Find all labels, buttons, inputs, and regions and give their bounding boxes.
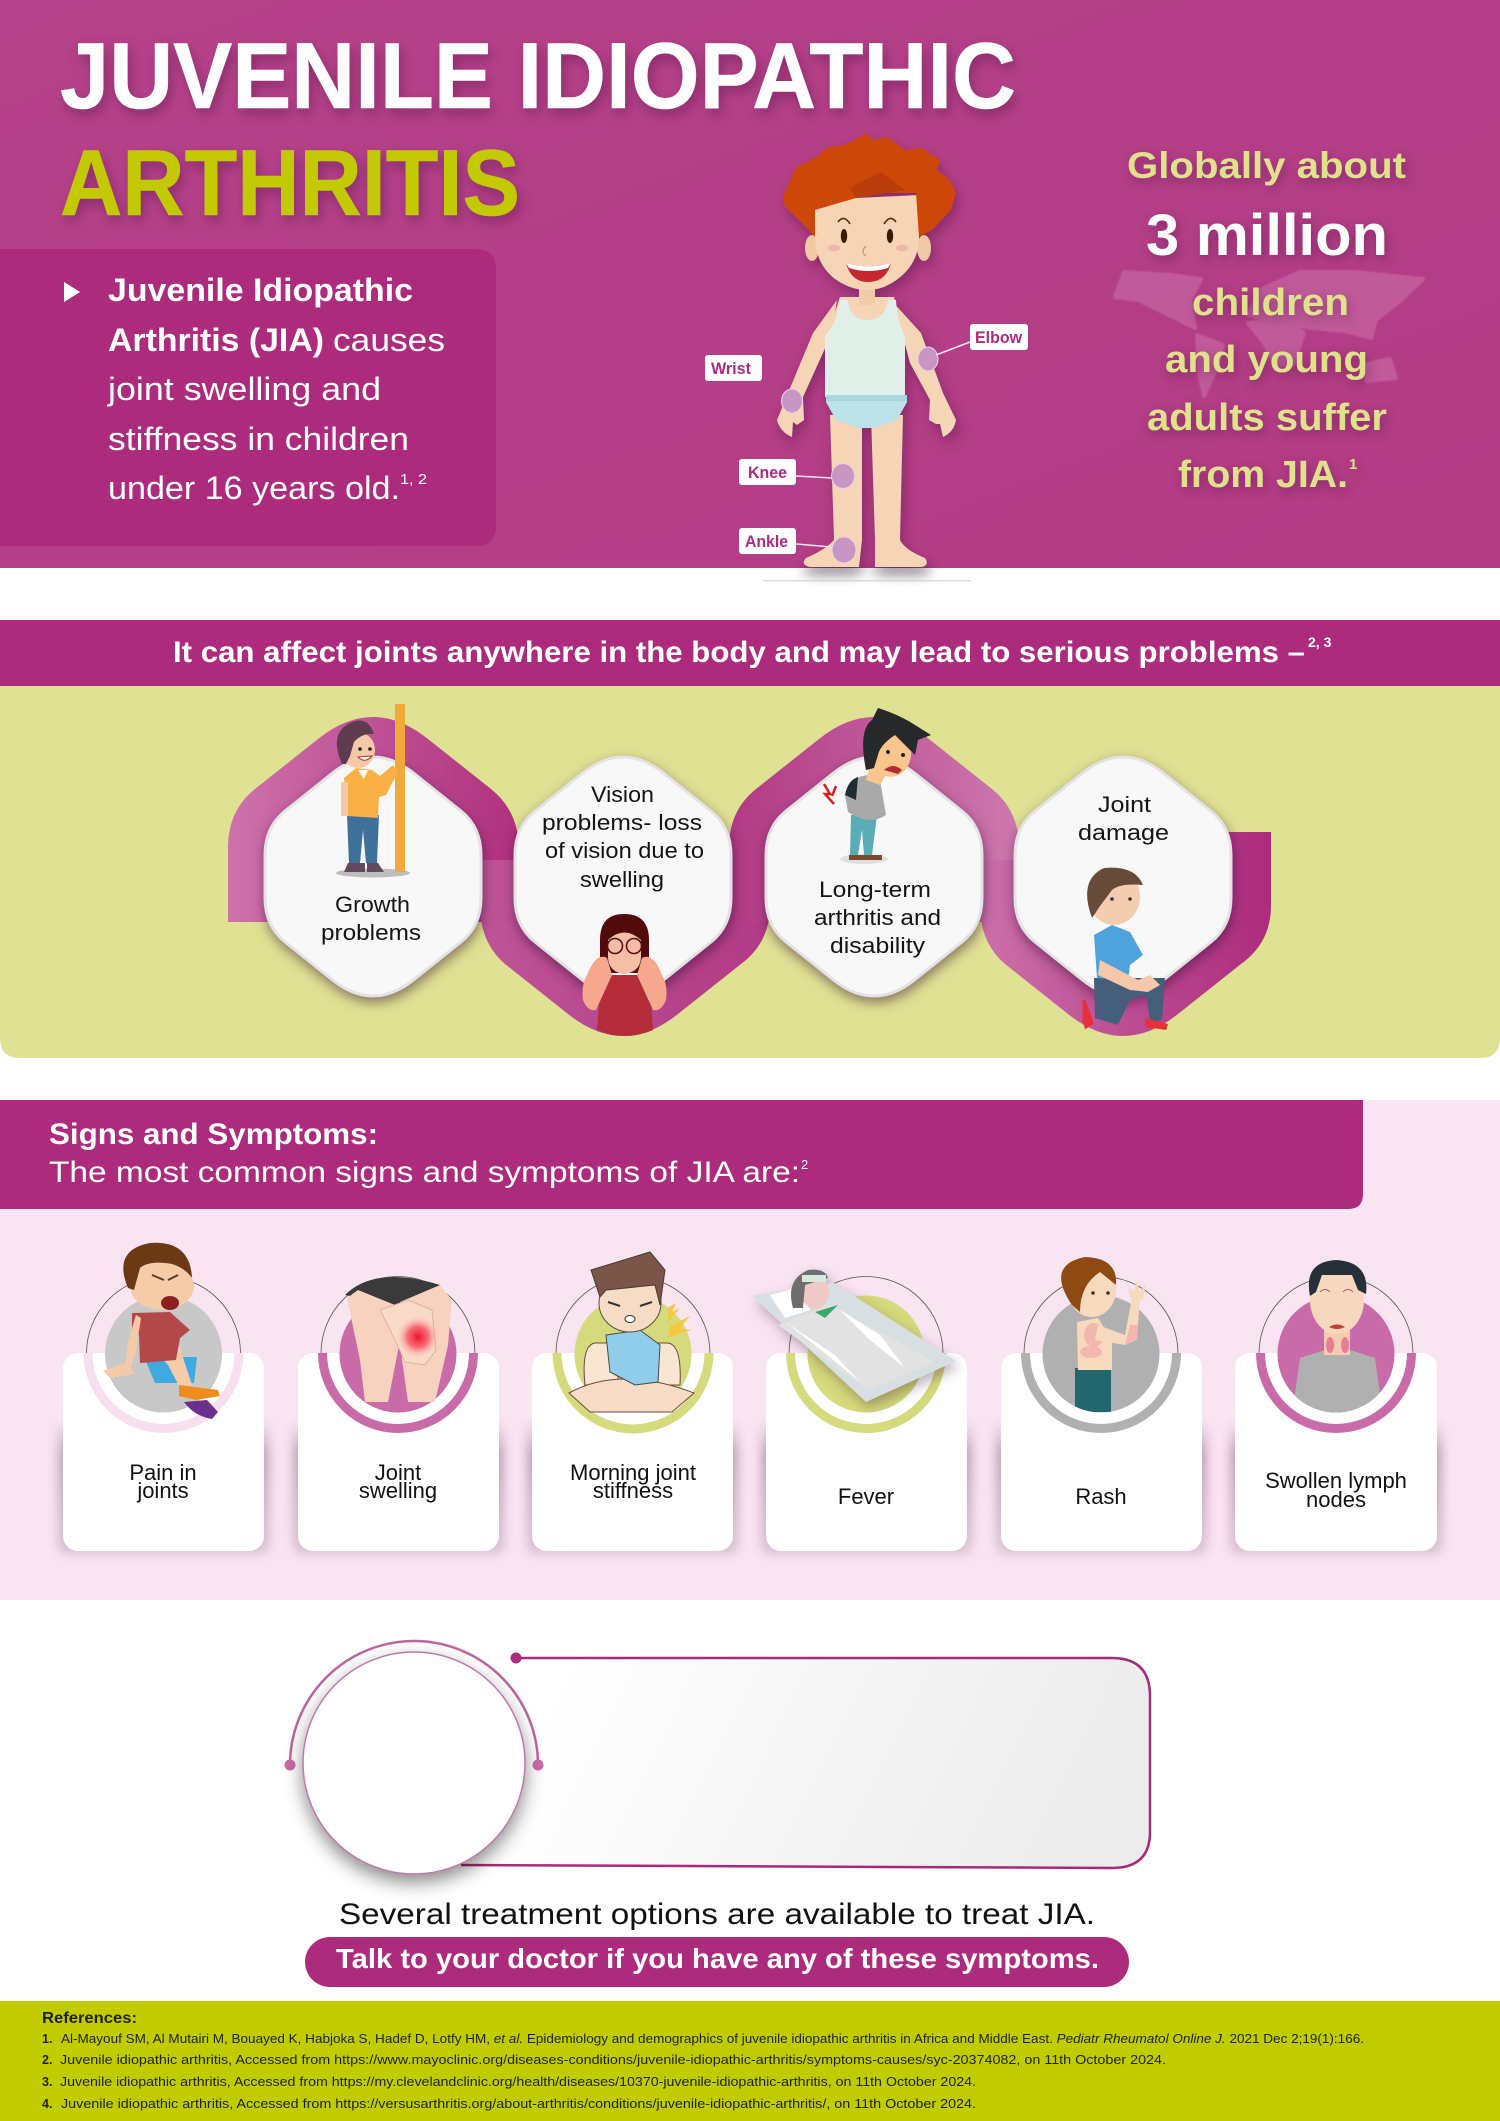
statistic text: and young xyxy=(1165,339,1368,381)
icon: girl with glasses xyxy=(582,914,666,1036)
empty circle xyxy=(303,1652,525,1874)
card: growth problems: problems xyxy=(321,920,421,945)
label: wrist xyxy=(705,355,762,381)
joint connectors xyxy=(796,342,970,547)
card: vision problems: Vision xyxy=(591,782,654,807)
symptom: swollen lymph nodes xyxy=(1230,1260,1442,1554)
statistic text: from JIA. xyxy=(1178,454,1348,496)
panel: references: Juvenile idiopathic arthritis, Accessed from https://www.mayoclinic.org/diseases-conditions/juvenile-idiopathic-arthritis/symptoms-causes/syc-20374082, on 11th October 2024. xyxy=(60,2053,1166,2067)
card: long-term arthritis: arthritis and xyxy=(814,905,941,930)
card: joint damage xyxy=(1015,757,1231,1030)
panel: references: Juvenile idiopathic arthritis, Accessed from https://versusarthritis.org/about-arthritis/conditions/juvenile-idiopathic-arthritis/, on 11th October 2024. xyxy=(61,2097,976,2111)
label: knee: Knee xyxy=(748,463,787,482)
statistic text: Globally about xyxy=(1127,145,1406,186)
icon: boy with rash xyxy=(1075,1318,1112,1412)
panel: references: Juvenile idiopathic arthritis, Accessed from https://my.clevelandclinic.org/health/diseases/10370-juvenile-idiopathic-arthritis, on 11th October 2024. xyxy=(60,2075,976,2089)
call to action pill: Talk to your doctor if you have any of these symptoms. xyxy=(336,1943,1099,1974)
icon: boy holding knee xyxy=(1084,868,1168,1030)
icon: boy by ruler xyxy=(336,704,410,878)
panel: signs and symptoms xyxy=(0,1100,1500,1600)
icon: man with swollen neck xyxy=(1294,1260,1380,1412)
definition text xyxy=(107,272,445,506)
heading bar xyxy=(0,1100,1363,1209)
symptom: swollen lymph nodes: nodes xyxy=(1306,1487,1366,1512)
definition text: 1, 2 xyxy=(400,471,427,488)
icon: man with back pain xyxy=(824,708,931,864)
symptom: pain in joints xyxy=(58,1243,269,1554)
title: arthritis: ARTHRITIS xyxy=(60,130,520,235)
banner: affects joints: It can affect joints anywhere in the body and may lead to serious problems – xyxy=(173,636,1305,669)
panel: references: References: xyxy=(42,2010,137,2027)
panel: definition xyxy=(0,249,496,546)
icon: swollen knee xyxy=(345,1277,452,1402)
panel: problems xyxy=(0,686,1500,1058)
statistic text xyxy=(1127,145,1406,496)
symptom: pain in joints: Pain in xyxy=(129,1460,197,1485)
heading bar: The most common signs and symptoms of JIA are: xyxy=(49,1156,800,1189)
symptom: swollen lymph nodes: Swollen lymph xyxy=(1265,1468,1407,1493)
world map xyxy=(1115,272,1423,396)
card: vision problems: problems- loss xyxy=(542,810,702,835)
statistic text: 1 xyxy=(1349,456,1357,473)
label: elbow: Elbow xyxy=(975,328,1023,347)
definition text: stiffness in children xyxy=(108,421,409,457)
label: elbow xyxy=(970,324,1028,350)
symptom: fever: Fever xyxy=(838,1484,894,1509)
banner outline xyxy=(461,1658,1150,1868)
panel: references: 3. xyxy=(42,2075,52,2089)
symptom: morning joint stiffness: Morning joint xyxy=(570,1460,696,1485)
symptom: rash: Rash xyxy=(1075,1484,1127,1509)
card: joint damage: Joint xyxy=(1098,792,1151,817)
joint highlights xyxy=(782,347,938,563)
banner: affects joints: 2, 3 xyxy=(1308,634,1332,650)
panel: references: Al-Mayouf SM, Al Mutairi M, Bouayed K, Habjoka S, Hadef D, Lotfy HM, et al. Epidemiology and demographics of juvenile idiopathic arthritis in Africa and Middle East. Pediatr Rheumatol Online J. 2021 Dec 2;19(1):166. xyxy=(61,2032,1364,2046)
panel: references: 2. xyxy=(42,2053,52,2067)
statistic text: 3 million xyxy=(1146,203,1388,268)
symptom: rash xyxy=(996,1257,1207,1554)
call to action pill xyxy=(305,1937,1129,1987)
symptom: morning joint stiffness xyxy=(527,1252,738,1554)
arc around circle xyxy=(284,1641,544,1770)
panel: treatment xyxy=(284,1641,1150,1987)
card: long-term arthritis: Long-term xyxy=(819,877,931,902)
card: joint damage: damage xyxy=(1078,820,1169,845)
card: vision problems: of vision due to xyxy=(545,838,704,863)
card: vision problems: swelling xyxy=(580,867,664,892)
icon: man with stiff shoulder xyxy=(569,1252,694,1412)
illustration: boy with joints xyxy=(705,133,1028,582)
symptom: morning joint stiffness: stiffness xyxy=(593,1478,673,1503)
statistic text: children xyxy=(1192,282,1349,324)
panel: references: 1. xyxy=(42,2032,52,2046)
card: long-term arthritis: disability xyxy=(830,933,925,958)
label: ankle xyxy=(739,528,796,554)
symptom: joint swelling: swelling xyxy=(359,1478,437,1503)
heading bar: 2 xyxy=(801,1157,808,1172)
card: growth problems xyxy=(265,704,481,996)
title: juvenile idiopathic: JUVENILE IDIOPATHIC xyxy=(60,23,1016,128)
icon: patient in bed xyxy=(752,1270,956,1402)
label: ankle: Ankle xyxy=(745,532,788,551)
definition text: joint swelling and xyxy=(107,371,381,407)
label: wrist: Wrist xyxy=(711,359,751,378)
statistic text: adults suffer xyxy=(1147,397,1387,439)
card: vision problems xyxy=(515,757,731,1036)
definition text: Juvenile Idiopathic xyxy=(108,272,413,308)
treatment text: Several treatment options are available to treat JIA. xyxy=(339,1898,1095,1931)
panel: references: 4. xyxy=(42,2097,52,2111)
label: knee xyxy=(739,459,796,485)
symptom: pain in joints: joints xyxy=(136,1478,189,1503)
icon: crying boy xyxy=(103,1243,220,1419)
card: long-term arthritis xyxy=(766,708,982,996)
panel: header xyxy=(0,0,1500,582)
panel: references xyxy=(0,2001,1500,2121)
heading bar: Signs and Symptoms: xyxy=(49,1118,378,1151)
icon: bullet triangle xyxy=(64,282,80,302)
icon: banner dot xyxy=(510,1652,522,1664)
empty banner xyxy=(461,1658,1150,1868)
card: growth problems: Growth xyxy=(335,892,410,917)
ribbon xyxy=(228,717,1271,1036)
symptom: joint swelling: Joint xyxy=(375,1460,421,1485)
definition text: Arthritis (JIA) xyxy=(108,322,324,358)
banner: affects joints xyxy=(0,620,1500,686)
definition text: causes xyxy=(333,322,445,358)
symptom: joint swelling xyxy=(293,1276,504,1554)
symptom: fever xyxy=(752,1270,972,1554)
definition text: under 16 years old. xyxy=(108,470,400,506)
